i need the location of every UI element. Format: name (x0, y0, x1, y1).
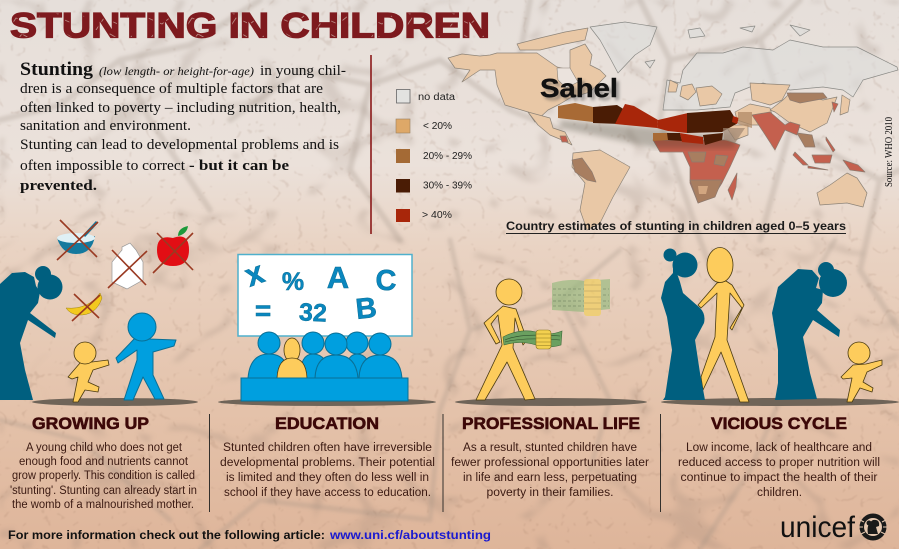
intro text block: Stunting (20, 60, 94, 80)
icon: banana crossed out (66, 293, 102, 321)
map legend: 30% - 39% (423, 180, 472, 192)
figure: adult holding money (476, 279, 535, 400)
intro text block: (low length- or height-for-age) (99, 64, 254, 78)
ground shadows (32, 398, 899, 406)
panel: education: school if they have access to education. (224, 487, 431, 499)
intro text block: dren is a consequence of multiple factors that are (20, 81, 323, 97)
footer link line: www.uni.cf/aboutstunting (329, 528, 491, 542)
figure: older child, blue (116, 313, 176, 400)
panel: professional life: poverty in their families. (486, 487, 614, 499)
map: Sahel band upper (558, 103, 752, 133)
map: Sahel band shadow (560, 120, 735, 148)
blackboard: 32 (298, 298, 328, 328)
footer link line (8, 528, 491, 542)
icon: milk carton crossed out (108, 243, 147, 289)
panel: growing up: grow properly. This condition is called (12, 470, 195, 482)
panel: vicious cycle: VICIOUS CYCLE (711, 414, 847, 433)
figure: malnourished mother (0, 266, 62, 400)
label: Sahel: Sahel (540, 73, 618, 103)
illustration: education (238, 254, 412, 401)
panel: vicious cycle: continue to impact the health of their (680, 472, 878, 484)
intro text block: sanitation and environment. (20, 118, 191, 134)
icon: money and coins held (503, 330, 562, 349)
world map of stunting (448, 22, 898, 230)
intro text block (20, 60, 346, 194)
blackboard: A (327, 260, 349, 295)
figure: pregnant mother (661, 248, 705, 400)
panel: professional life: PROFESSIONAL LIFE (462, 414, 640, 433)
classroom children (248, 332, 402, 378)
panel: education: Stunted children often have irreversible (223, 442, 432, 454)
panel: professional life: in life and earn less, perpetuating (463, 472, 637, 484)
intro text block: often linked to poverty – including nutrition, health, (20, 100, 341, 116)
panel: growing up: the womb of a malnourished mother. (12, 499, 194, 511)
blackboard: B (354, 292, 378, 326)
map legend: no data (418, 92, 455, 103)
panel: professional life: fewer professional opportunities later (451, 457, 649, 469)
map: Sahel band lower (653, 128, 745, 145)
panel: education: EDUCATION (275, 414, 379, 433)
blackboard: % (282, 268, 304, 296)
figure: young child, yellow (68, 342, 109, 402)
panel: vicious cycle: reduced access to proper nutrition will (678, 457, 880, 469)
panel: growing up (10, 414, 197, 511)
intro text block: in young chil- (260, 63, 346, 79)
panel: education (220, 414, 435, 499)
panel: professional life: As a result, stunted children have (463, 442, 637, 454)
map legend: < 20% (423, 121, 452, 132)
map: low-stunting regions (448, 28, 867, 230)
panel: growing up: GROWING UP (32, 414, 149, 433)
blackboard: C (376, 265, 397, 297)
icon: faded money stack (552, 279, 610, 316)
panel: vicious cycle (678, 414, 880, 499)
footer link line: For more information check out the following article: (8, 528, 325, 542)
panel: growing up: enough food and nutrients cannot (19, 456, 189, 468)
unicef logo: unicef (780, 511, 856, 544)
label: Sahel: Sahel (543, 76, 621, 106)
panel: growing up: 'stunting'. Stunting can already start in (10, 485, 197, 497)
panel: growing up: A young child who does not get (26, 442, 183, 454)
map legend: > 40% (422, 210, 452, 221)
source note: Source: WHO 2010 (884, 117, 895, 187)
panel: education: developmental problems. Their potential (220, 457, 435, 469)
intro text block: often impossible to correct (20, 158, 186, 174)
panel: education: is limited and they often do less well in (226, 472, 429, 484)
illustration: professional life (476, 279, 610, 400)
illustration: growing up (0, 220, 193, 402)
intro text block: Stunting can lead to developmental problems and is (20, 137, 339, 153)
panel: professional life (451, 414, 649, 499)
intro text block: prevented. (20, 178, 97, 194)
figure: father (698, 248, 749, 402)
title: STUNTING IN CHILDREN (10, 6, 490, 46)
classroom bench (241, 378, 408, 401)
icon: bowl crossed out (57, 220, 98, 260)
map: moderate and high regions (560, 93, 865, 203)
illustration: vicious cycle (661, 248, 882, 402)
icon: apple crossed out (153, 226, 193, 273)
map legend (396, 90, 472, 222)
intro text block: - but it can be (189, 158, 289, 174)
map legend: 20% - 29% (423, 151, 472, 162)
map caption: Country estimates of stunting in children aged 0–5 years (506, 221, 846, 233)
blackboard: x (240, 254, 269, 294)
blackboard (238, 254, 412, 336)
figure: mother bent over (772, 262, 847, 400)
blackboard: = (255, 295, 271, 326)
icon: unicef globe emblem (859, 514, 887, 540)
map: no-data regions (590, 22, 898, 110)
figure: young child (841, 342, 882, 402)
panel: vicious cycle: Low income, lack of healthcare and (686, 442, 872, 454)
panel: vicious cycle: children. (757, 487, 802, 499)
